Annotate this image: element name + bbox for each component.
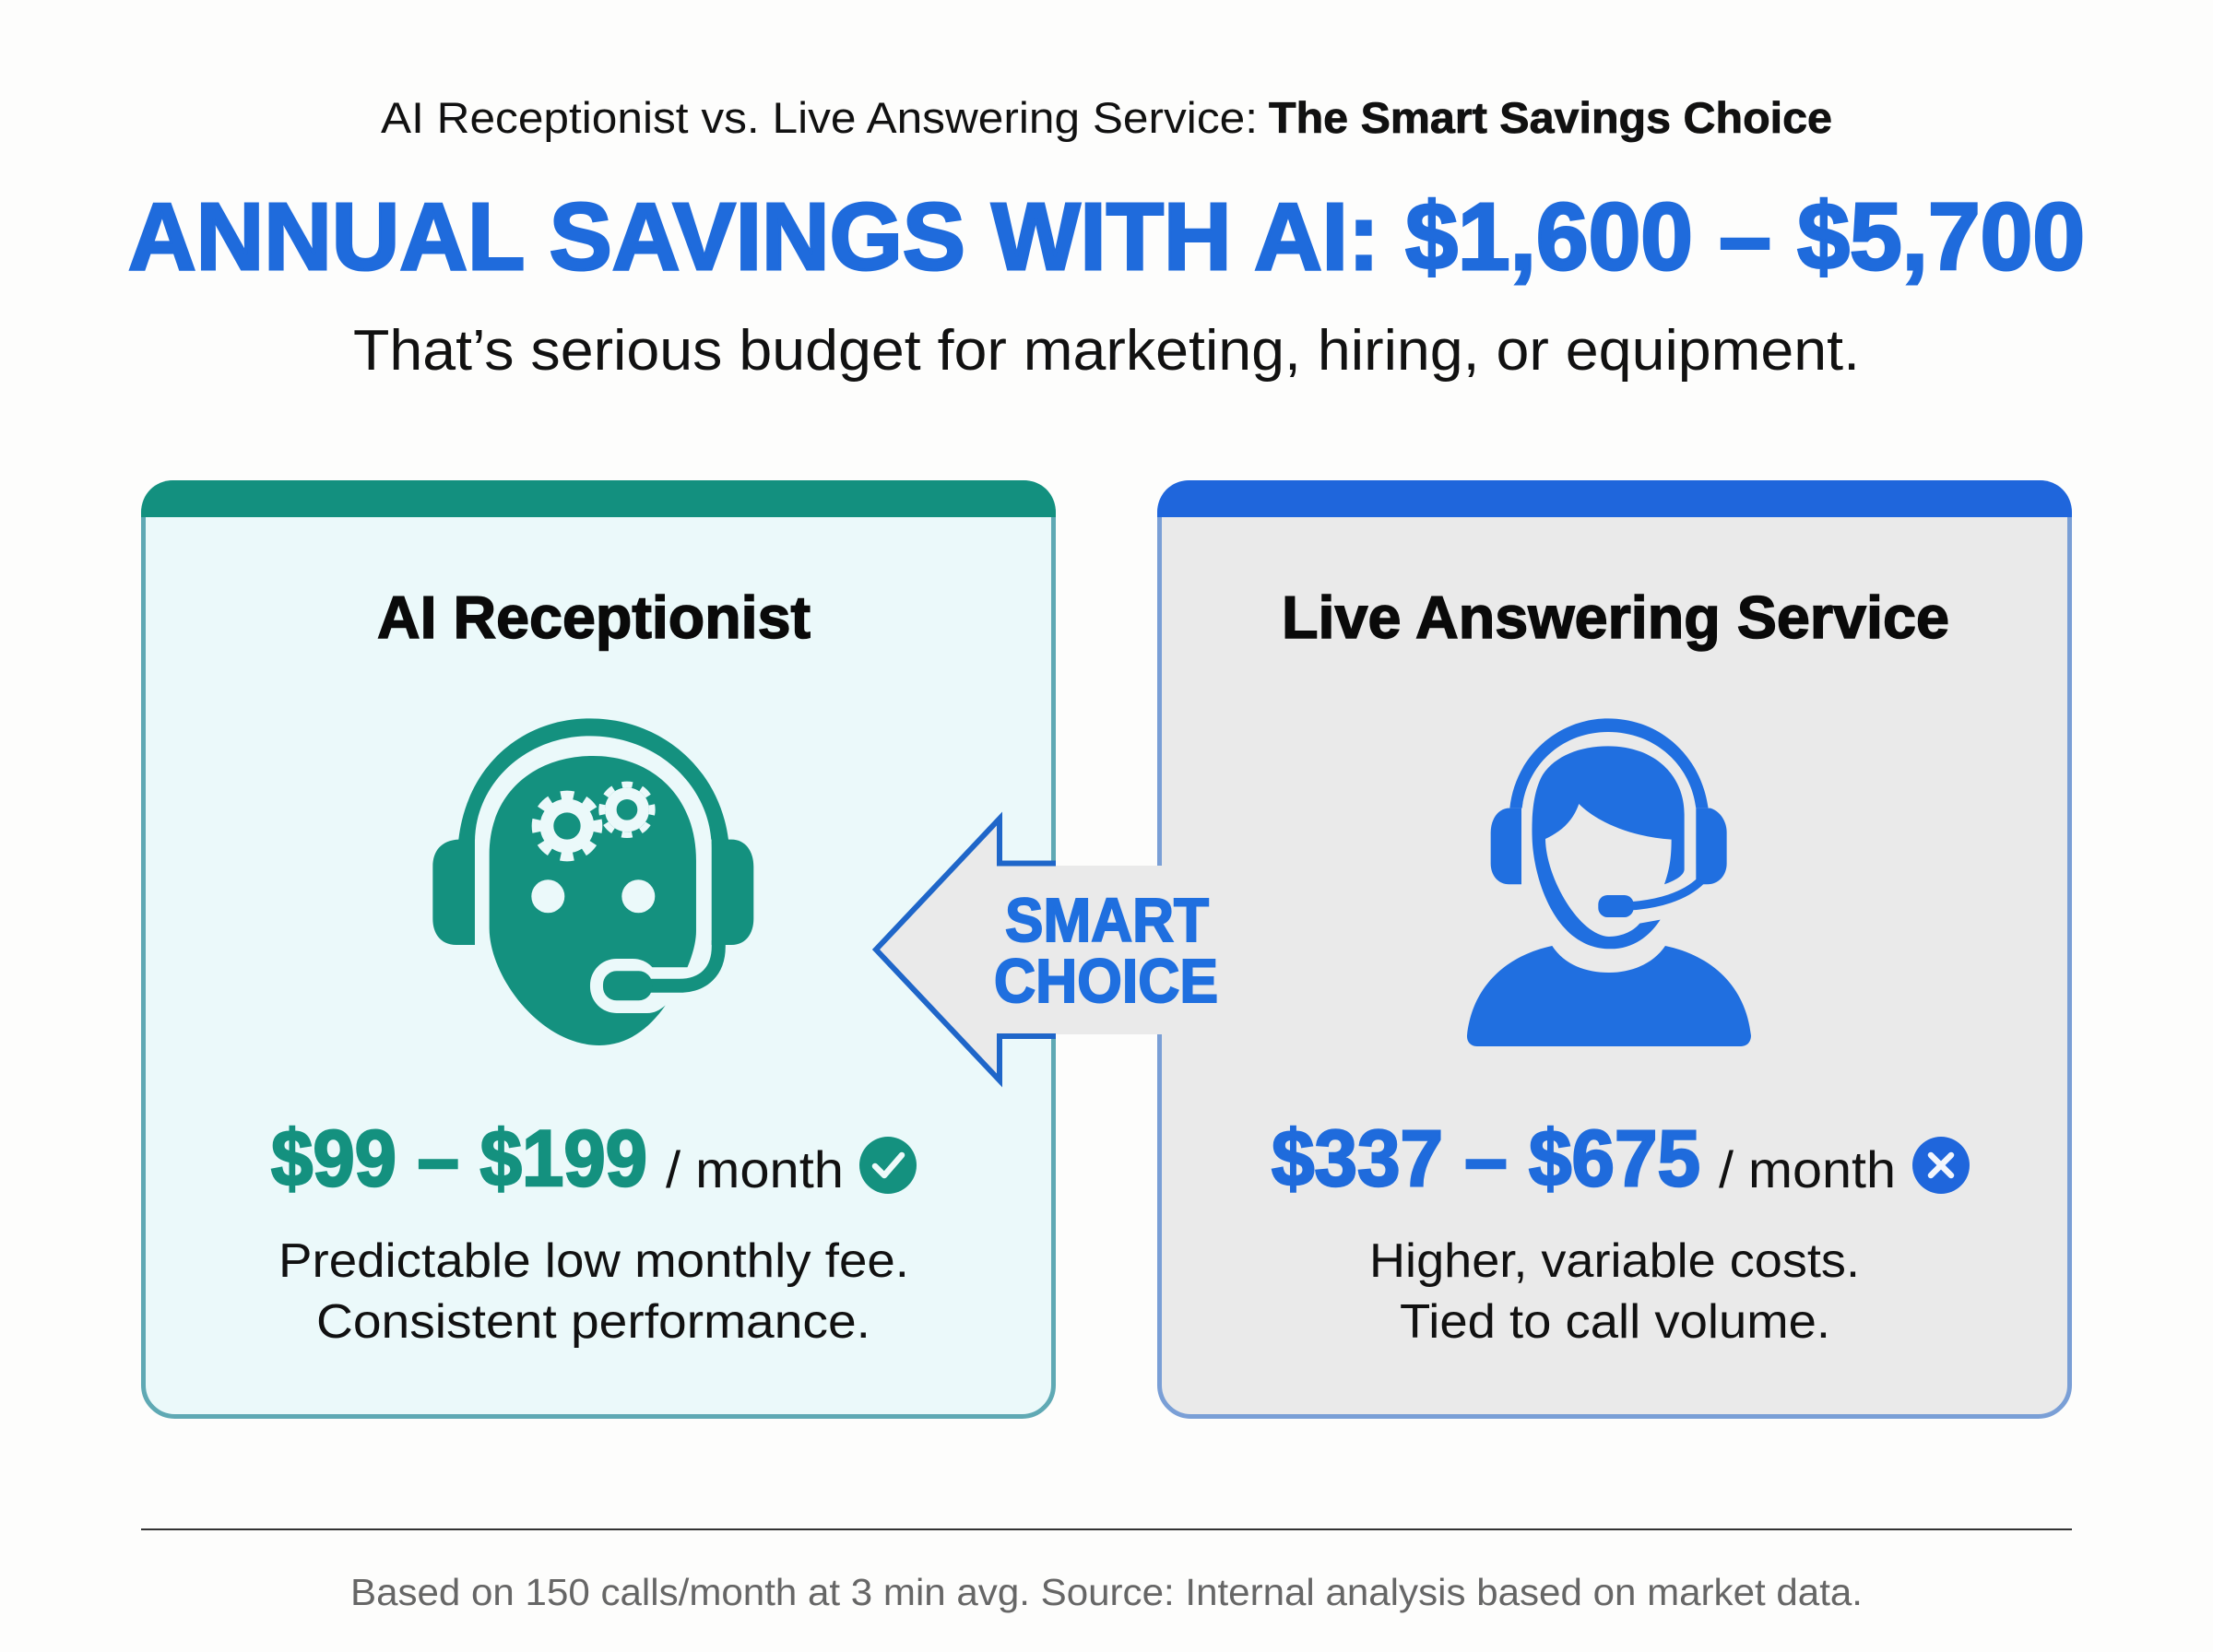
- blue top bar: [1157, 480, 2072, 517]
- eyebrow line: [381, 93, 1832, 142]
- panel heading: Live Answering Service: [1282, 584, 1949, 651]
- eyebrow line: The Smart Savings Choice: [1269, 93, 1832, 142]
- arrow label: SMART: [1005, 886, 1209, 955]
- header block: [128, 93, 2085, 383]
- panel heading: AI Receptionist: [377, 584, 811, 651]
- price row: / month: [1719, 1140, 1896, 1198]
- arrow label: CHOICE: [994, 947, 1218, 1016]
- description: Higher, variable costs.: [1369, 1234, 1860, 1288]
- arrow: smart choice: [876, 819, 1218, 1080]
- icon: check badge: [859, 1137, 917, 1194]
- source note: Based on 150 calls/month at 3 min avg. Source: Internal analysis based on market data.: [350, 1571, 1863, 1613]
- icon: robot head with headset and gears: [432, 718, 753, 1045]
- price row: [1272, 1115, 1970, 1203]
- panel frame: [144, 483, 1053, 1416]
- description: [1369, 1234, 1860, 1349]
- arrow label: [994, 886, 1218, 1016]
- price row: / month: [666, 1140, 844, 1198]
- description: Tied to call volume.: [1400, 1295, 1830, 1349]
- icon: cross badge: [1912, 1137, 1970, 1194]
- subtitle: That’s serious budget for marketing, hiring, or equipment.: [353, 319, 1860, 383]
- icon: human agent with headset: [1467, 718, 1751, 1046]
- price row: $99 – $199: [271, 1115, 647, 1203]
- description: Predictable low monthly fee.: [278, 1234, 909, 1288]
- description: [278, 1234, 909, 1349]
- title: ANNUAL SAVINGS WITH AI: $1,600 – $5,700: [128, 183, 2085, 289]
- panel: AI Receptionist: [141, 480, 1056, 1416]
- description: Consistent performance.: [316, 1295, 870, 1349]
- panel frame: [1160, 483, 2069, 1416]
- eyebrow line: AI Receptionist vs. Live Answering Service:: [381, 93, 1258, 142]
- teal top bar: [141, 480, 1056, 517]
- price row: [271, 1115, 917, 1203]
- price row: $337 – $675: [1272, 1115, 1700, 1203]
- panel: Live Answering Service: [1157, 480, 2072, 1416]
